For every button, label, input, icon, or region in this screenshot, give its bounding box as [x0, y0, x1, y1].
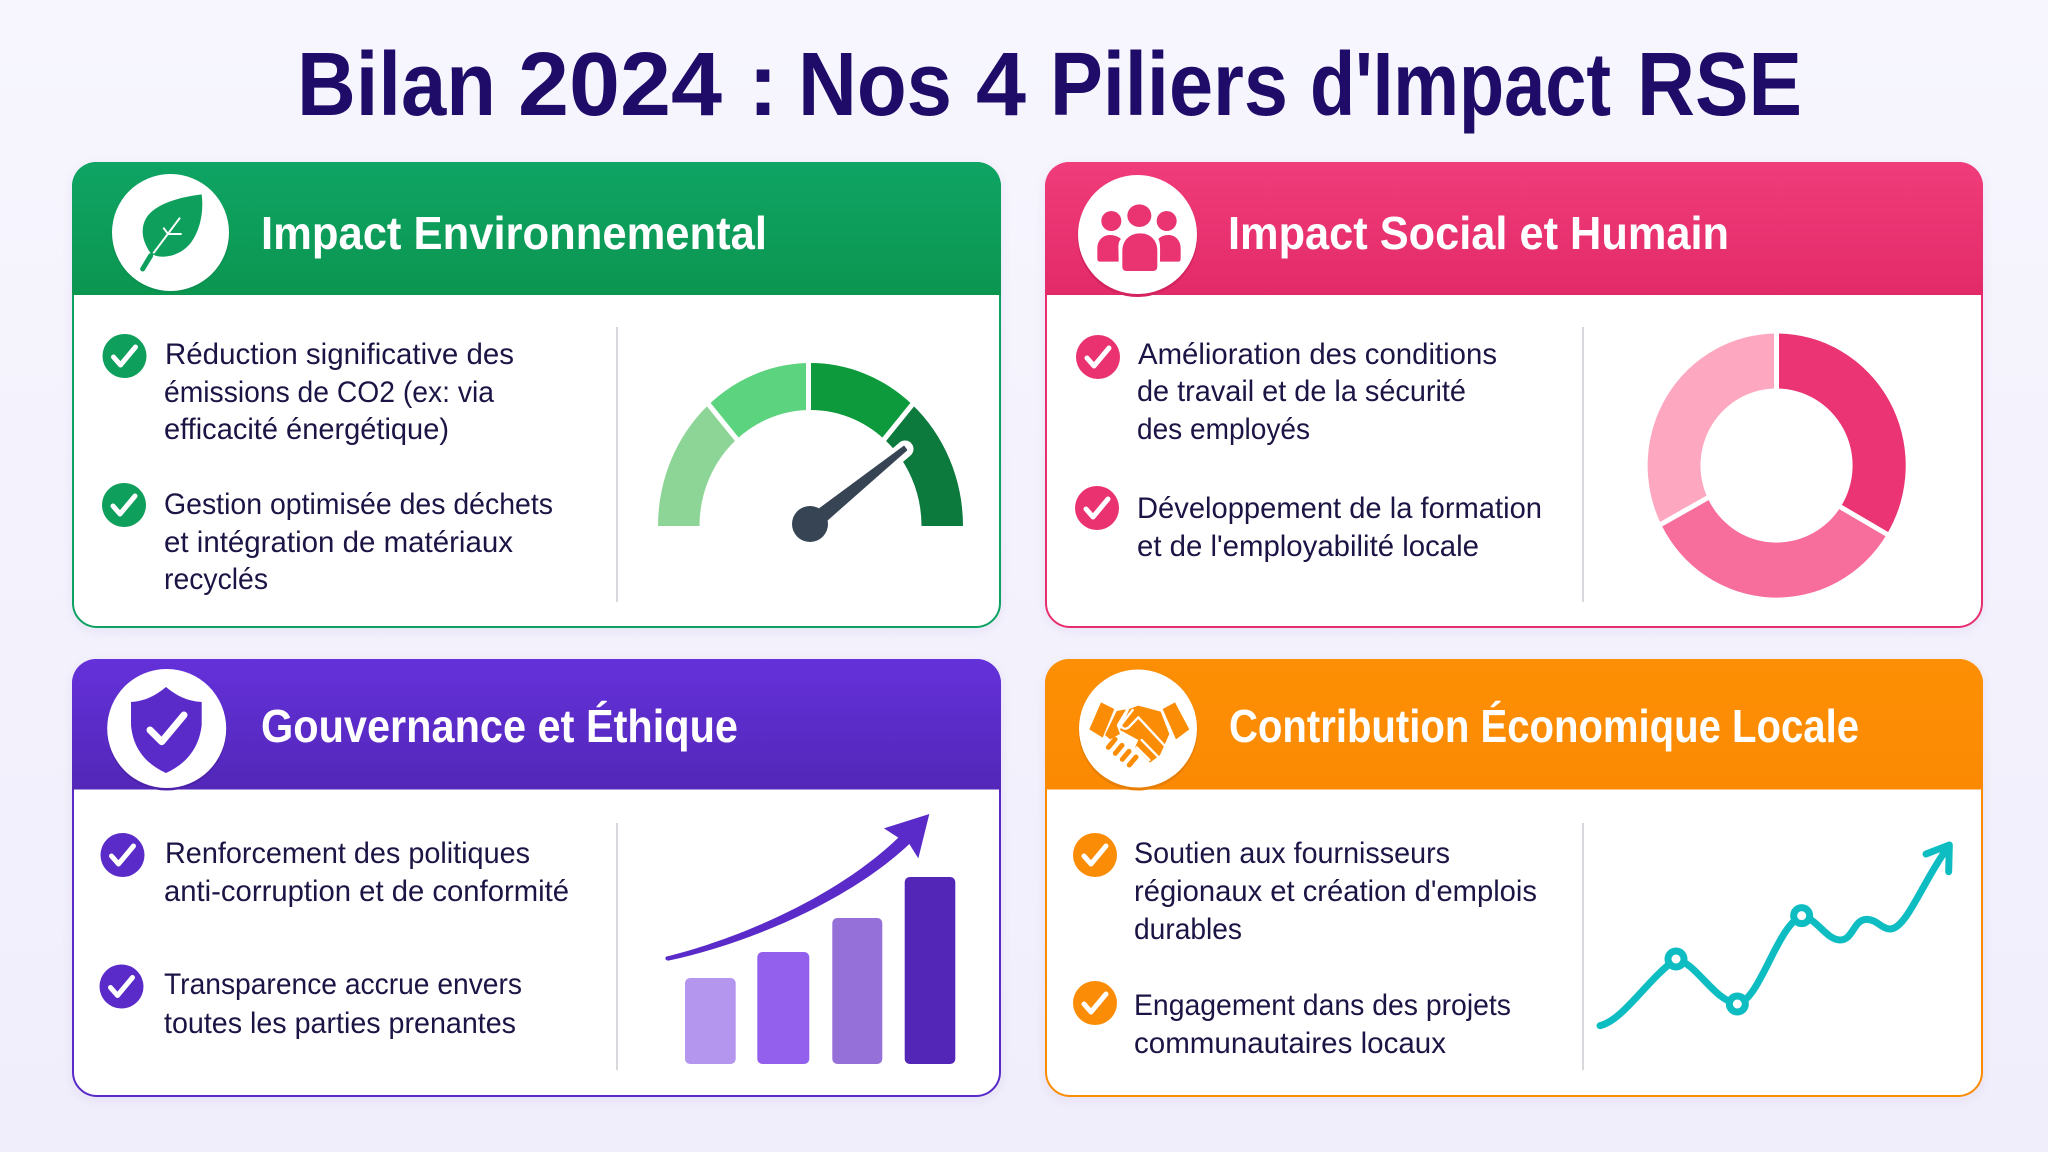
- bullet text: waste: recyclés: [164, 563, 268, 596]
- title: :: [748, 35, 778, 135]
- bullet check icon: [102, 334, 146, 378]
- bullet text: transparency: Transparence accrue envers: [164, 968, 522, 1001]
- panel: governance: [72, 659, 1001, 1096]
- bullet text: working conditions: de travail et de la sécurité: [1137, 375, 1466, 408]
- bar chart with rising arrow: [665, 814, 955, 1064]
- heading: economy: Contribution Économique Locale: [1229, 700, 1859, 752]
- title: d'Impact: [1310, 35, 1611, 135]
- bullet text: CO2: émissions de CO2 (ex: via: [164, 376, 494, 409]
- bullet text: suppliers: Soutien aux fournisseurs: [1134, 837, 1450, 870]
- bullet text: anti-corruption: anti-corruption et de conformité: [164, 875, 569, 908]
- title: RSE: [1637, 35, 1802, 135]
- bullet text: anti-corruption: Renforcement des politiques: [165, 837, 530, 870]
- bullet text: training: et de l'employabilité locale: [1137, 530, 1479, 563]
- bullet text: community: Engagement dans des projets: [1134, 989, 1511, 1022]
- bullet text: suppliers: [1134, 837, 1537, 946]
- header band: social: [1045, 162, 1983, 295]
- title: Piliers: [1050, 35, 1288, 135]
- bullet text: community: [1134, 989, 1511, 1060]
- panel: social impact: [1045, 162, 1983, 627]
- bullet text: suppliers: régionaux et création d'emplois: [1134, 875, 1537, 908]
- bullet text: CO2: efficacité énergétique): [164, 413, 449, 446]
- bullet text: anti-corruption: [164, 837, 569, 908]
- bullet check icon: [1076, 335, 1120, 379]
- bullet check icon: [100, 833, 144, 877]
- panel: local economy: [1045, 659, 1983, 1096]
- title: [297, 35, 1802, 135]
- bullet text: working conditions: Amélioration des conditions: [1138, 338, 1497, 371]
- bullet check icon: [1073, 981, 1117, 1025]
- icon: leaf: [112, 174, 230, 293]
- donut chart: [1648, 330, 1906, 598]
- heading: social: Impact Social et Humain: [1228, 207, 1729, 259]
- bullet check icon: [1073, 833, 1117, 877]
- bullet text: suppliers: durables: [1134, 913, 1242, 946]
- title: 4: [976, 35, 1026, 135]
- heading: governance: Gouvernance et Éthique: [261, 700, 738, 752]
- panel: environmental impact: [72, 162, 1001, 627]
- bullet text: waste: Gestion optimisée des déchets: [164, 488, 553, 521]
- gauge chart: [658, 358, 963, 542]
- bullet text: CO2: [164, 338, 514, 446]
- bullet text: waste: et intégration de matériaux: [164, 526, 513, 559]
- icon: handshake: [1078, 670, 1198, 790]
- bullet text: training: [1137, 492, 1542, 563]
- icon: shield: [107, 669, 226, 790]
- header band: environmental: [72, 162, 1001, 295]
- heading: environmental: Impact Environnemental: [261, 207, 767, 259]
- bullet text: training: Développement de la formation: [1137, 492, 1542, 525]
- title: 2024: [518, 35, 722, 135]
- icon: people: [1078, 175, 1198, 297]
- bullet text: working conditions: des employés: [1137, 413, 1310, 446]
- bullet text: waste: [164, 488, 553, 596]
- title: Bilan: [297, 35, 496, 135]
- bullet text: community: communautaires locaux: [1134, 1027, 1446, 1060]
- line chart with arrow: [1600, 845, 1949, 1026]
- header band: economy: [1045, 659, 1983, 790]
- bullet check icon: [102, 483, 146, 527]
- title: Nos: [798, 35, 952, 135]
- bullet text: working conditions: [1137, 338, 1497, 446]
- bullet check icon: [100, 964, 144, 1008]
- bullet check icon: [1075, 486, 1119, 530]
- bullet text: transparency: toutes les parties prenantes: [164, 1007, 516, 1040]
- bullet text: transparency: [164, 968, 522, 1040]
- header band: governance: [72, 659, 1001, 790]
- bullet text: CO2: Réduction significative des: [165, 338, 514, 371]
